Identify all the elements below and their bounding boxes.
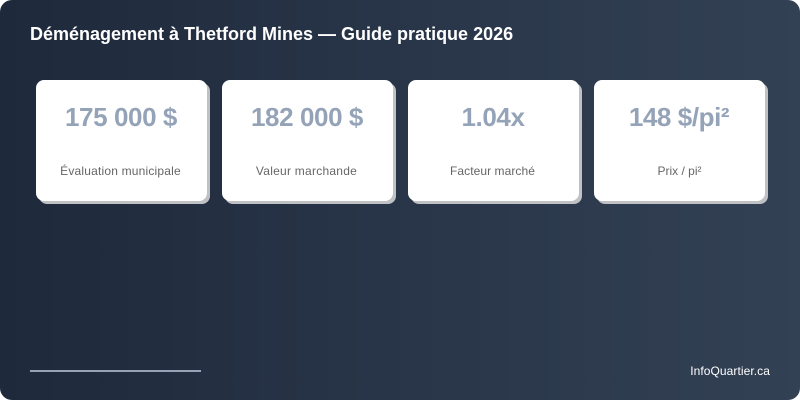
value: facteur: 1.04x — [461, 102, 524, 132]
brand name: InfoQuartier.ca — [690, 364, 770, 378]
value: prix: 148 $/pi² — [629, 102, 729, 132]
card: valeur marchande — [222, 80, 393, 201]
footer accent line — [30, 370, 201, 372]
label: évaluation: Évaluation municipale — [60, 164, 181, 178]
label: valeur marchande: Valeur marchande — [256, 164, 357, 178]
title: Déménagement à Thetford Mines — Guide pratique 2026 — [30, 24, 513, 44]
card: prix au pied carré — [594, 80, 765, 201]
label: prix: Prix / pi² — [657, 164, 702, 178]
card: facteur marché — [408, 80, 579, 201]
value: valeur marchande: 182 000 $ — [251, 102, 363, 132]
card: évaluation municipale — [36, 80, 207, 201]
label: facteur: Facteur marché — [450, 164, 535, 178]
value: évaluation: 175 000 $ — [65, 102, 177, 132]
